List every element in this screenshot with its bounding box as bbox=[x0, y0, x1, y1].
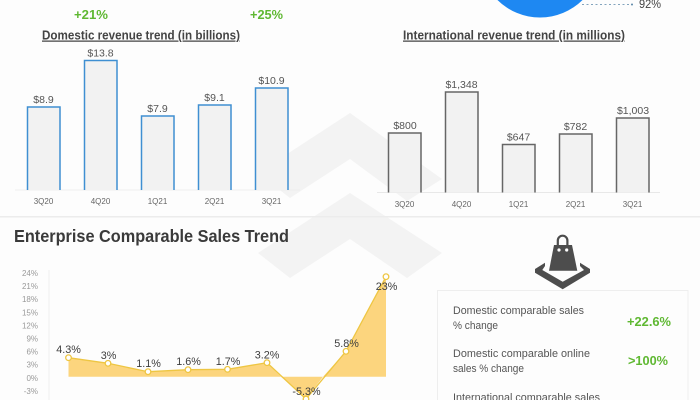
heading: international revenue trend: International revenue trend (in millions) bbox=[403, 28, 625, 42]
area chart: comparable sales trend: 9% bbox=[26, 334, 38, 344]
area chart: comparable sales trend: 24% bbox=[22, 269, 38, 278]
area chart: comparable sales trend: 3% bbox=[26, 360, 38, 370]
area chart: comparable sales trend bbox=[22, 269, 398, 400]
bar chart: domestic revenue: $13.8 bbox=[87, 48, 114, 60]
watermark: double chevron bbox=[258, 113, 442, 278]
section title: Enterprise Comparable Sales Trend bbox=[14, 226, 289, 246]
area chart: comparable sales trend: 3.2% bbox=[255, 350, 280, 362]
area chart: comparable sales trend: 21% bbox=[22, 282, 38, 291]
bar chart: domestic revenue: 1Q21 bbox=[148, 197, 168, 206]
metric: domestic comparable sales bbox=[453, 305, 671, 332]
bar chart: international revenue: 3Q20 bbox=[395, 200, 415, 209]
metric: domestic comparable online sales: Domestic comparable online bbox=[453, 348, 590, 360]
area chart: comparable sales trend: 18% bbox=[22, 295, 38, 304]
bar chart: international revenue: $1,003 bbox=[617, 105, 649, 117]
area chart: comparable sales trend: 12% bbox=[22, 322, 38, 330]
metric: domestic comparable sales: % change bbox=[453, 320, 498, 332]
pie chart fragment with 92% callout bbox=[480, 0, 661, 18]
bar chart: domestic revenue: 3Q20 bbox=[34, 197, 54, 206]
heading: domestic revenue trend: Domestic revenue trend (in billions) bbox=[42, 28, 240, 42]
bar chart: international revenue bbox=[377, 79, 660, 209]
growth figure: international +25%: +25% bbox=[250, 7, 283, 22]
area chart: comparable sales trend: 3% bbox=[101, 350, 117, 362]
panel: comparable sales metrics bbox=[438, 290, 688, 400]
area chart: comparable sales trend: 1.1% bbox=[136, 358, 161, 370]
area chart: comparable sales trend: 6% bbox=[26, 348, 38, 356]
area chart: comparable sales trend: 0% bbox=[26, 374, 38, 383]
bar chart: domestic revenue: 3Q21 bbox=[262, 197, 282, 206]
bar chart: domestic revenue bbox=[15, 48, 300, 206]
bar chart: international revenue: $782 bbox=[564, 121, 587, 133]
area chart: comparable sales trend: 15% bbox=[22, 308, 38, 318]
icon: shopping bag on tray bbox=[535, 236, 590, 289]
bar chart: international revenue: 2Q21 bbox=[566, 200, 586, 209]
area chart: comparable sales trend: 23% bbox=[376, 281, 398, 293]
area chart: comparable sales trend: -5.3% bbox=[292, 386, 321, 398]
bar chart: international revenue: 3Q21 bbox=[623, 200, 643, 209]
bar chart: domestic revenue: 4Q20 bbox=[91, 197, 111, 206]
bar chart: international revenue: 4Q20 bbox=[452, 200, 472, 209]
metric: domestic comparable sales: Domestic comparable sales bbox=[453, 305, 584, 317]
area chart: comparable sales trend: 1.7% bbox=[216, 356, 241, 368]
area chart: comparable sales trend: 5.8% bbox=[334, 338, 359, 350]
bar chart: domestic revenue: $9.1 bbox=[204, 92, 225, 104]
bar chart: domestic revenue: 2Q21 bbox=[205, 197, 225, 206]
growth figure: domestic +21%: +21% bbox=[74, 7, 108, 22]
bar chart: international revenue: $1,348 bbox=[445, 79, 478, 91]
bar chart: international revenue: $647 bbox=[507, 132, 530, 144]
area chart: comparable sales trend: -3% bbox=[24, 387, 38, 396]
metric: domestic comparable online sales bbox=[453, 348, 668, 375]
metric: domestic comparable online sales: >100% bbox=[628, 353, 668, 368]
bar chart: domestic revenue: $10.9 bbox=[258, 75, 285, 87]
bar chart: domestic revenue: $7.9 bbox=[147, 103, 168, 115]
area chart: comparable sales trend: 4.3% bbox=[56, 344, 81, 356]
bar chart: international revenue: 1Q21 bbox=[509, 200, 529, 209]
metric: domestic comparable sales: +22.6% bbox=[627, 314, 671, 329]
bar chart: international revenue: $800 bbox=[393, 120, 417, 132]
bar chart: domestic revenue: $8.9 bbox=[33, 94, 54, 106]
area chart: comparable sales trend: 1.6% bbox=[176, 356, 201, 368]
metric: domestic comparable online sales: sales % change bbox=[453, 363, 524, 375]
